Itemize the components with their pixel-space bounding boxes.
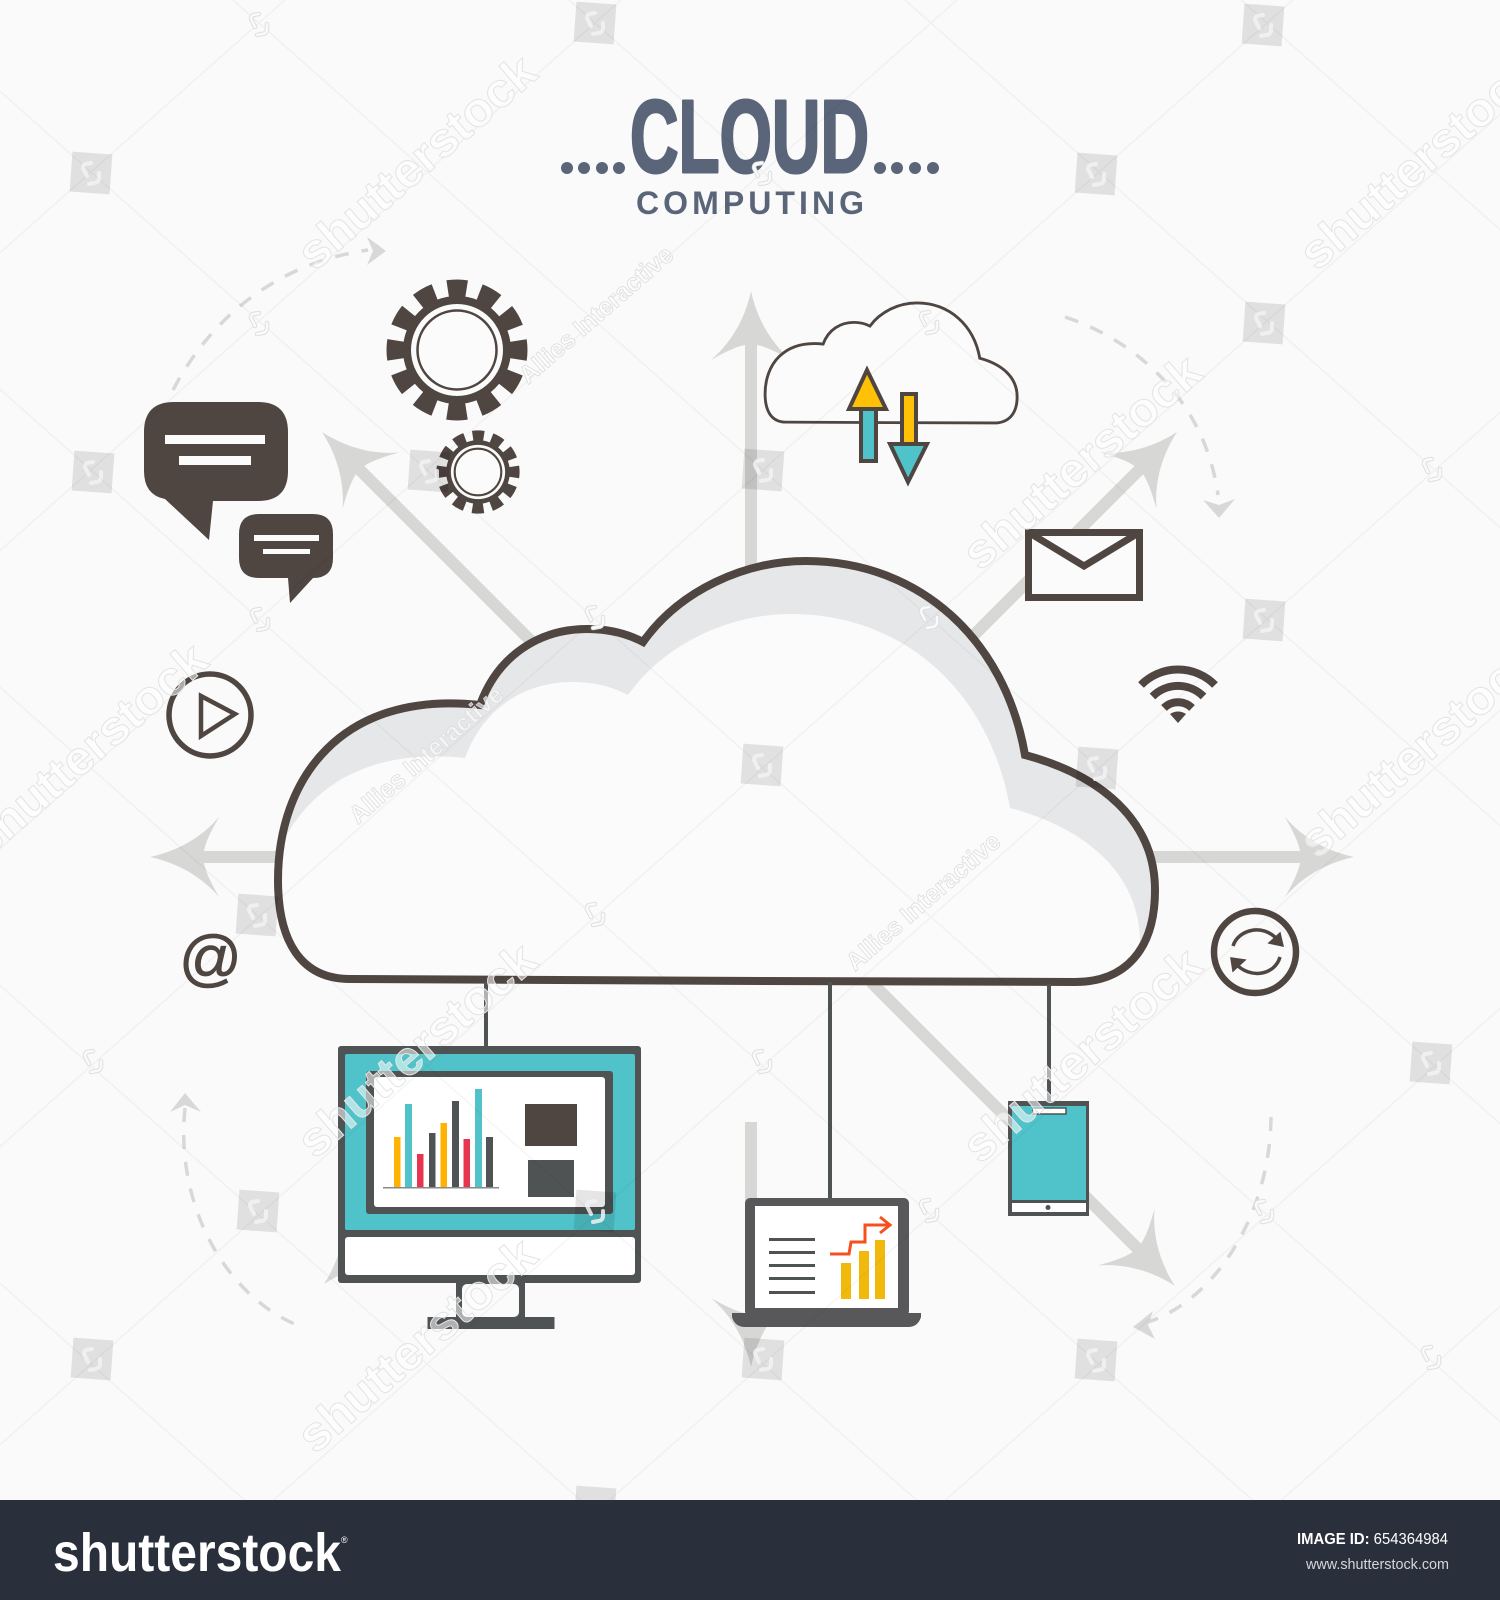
icon: small gear: [436, 430, 520, 514]
watermark text: shutterstock: [952, 345, 1212, 580]
watermark small marks: [85, 14, 1440, 1368]
footer image id: IMAGE ID: 654364984: [1297, 1531, 1448, 1548]
watermark text: shutterstock: [287, 933, 547, 1168]
icon: laptop with growth chart: [732, 1198, 921, 1327]
monitor stand: [456, 1280, 525, 1320]
title: [561, 79, 939, 221]
dashed arc: bottom right: [1133, 1117, 1271, 1339]
icon: refresh: [1214, 911, 1296, 993]
footer bar: [0, 1500, 1500, 1600]
monitor body: [338, 1046, 641, 1283]
arrow: north west: [294, 404, 559, 669]
bar chart: [383, 1089, 499, 1188]
connector: cloud to tablet: [1047, 984, 1051, 1102]
arrow: south west: [296, 1207, 401, 1312]
watermark allies: Allies Interactive: [344, 680, 509, 830]
footer registered mark: ®: [341, 1535, 348, 1545]
arrow: south east: [843, 954, 1203, 1314]
growth arrow: [830, 1217, 890, 1254]
arrow: up: [711, 291, 791, 571]
download arrow: [890, 394, 927, 482]
text lines: [769, 1238, 815, 1294]
watermark allies: Allies Interactive: [514, 240, 679, 390]
arrow: left: [150, 817, 285, 897]
upload arrow: [849, 370, 886, 461]
arrow: south: [711, 1122, 791, 1367]
dashed arc: top right: [1065, 317, 1235, 518]
watermark allies: [344, 240, 1006, 977]
subtitle: COMPUTING: [636, 185, 864, 221]
watermark text: shutterstock: [952, 938, 1212, 1173]
icon: envelope: [1028, 532, 1140, 598]
watermark allies: Allies Interactive: [841, 827, 1006, 977]
watermark text: shutterstock: [287, 45, 547, 280]
icon: tablet: [1008, 1101, 1089, 1216]
icon: desktop monitor with charts: [338, 1046, 641, 1329]
dashed arc: bottom left: [170, 1093, 297, 1325]
icon: small cloud with transfer arrows: [765, 303, 1017, 482]
icon: wifi: [1141, 670, 1215, 723]
icon: at sign: @: [179, 924, 242, 993]
title dots right: [874, 162, 939, 174]
title word cloud: CLOUD: [630, 79, 869, 194]
icon: large gear: [386, 279, 528, 421]
icon: large chat bubble: [144, 402, 288, 540]
arrow: right: [1149, 817, 1354, 897]
icon: small chat bubble: [239, 514, 333, 603]
central cloud: [274, 557, 1159, 986]
icon: play button: [169, 674, 251, 756]
title dots left: [561, 162, 625, 174]
dashed arc: top left: [173, 237, 386, 390]
growth bars: [841, 1240, 885, 1299]
footer url: www.shutterstock.com: [1305, 1556, 1449, 1573]
panel squares: [525, 1104, 577, 1146]
footer logo: shutterstock: [53, 1523, 342, 1583]
connector: cloud to monitor: [484, 982, 488, 1048]
watermark text: shutterstock: [287, 1228, 547, 1463]
arrow: north east: [944, 404, 1205, 665]
connector: cloud to laptop: [828, 982, 832, 1200]
